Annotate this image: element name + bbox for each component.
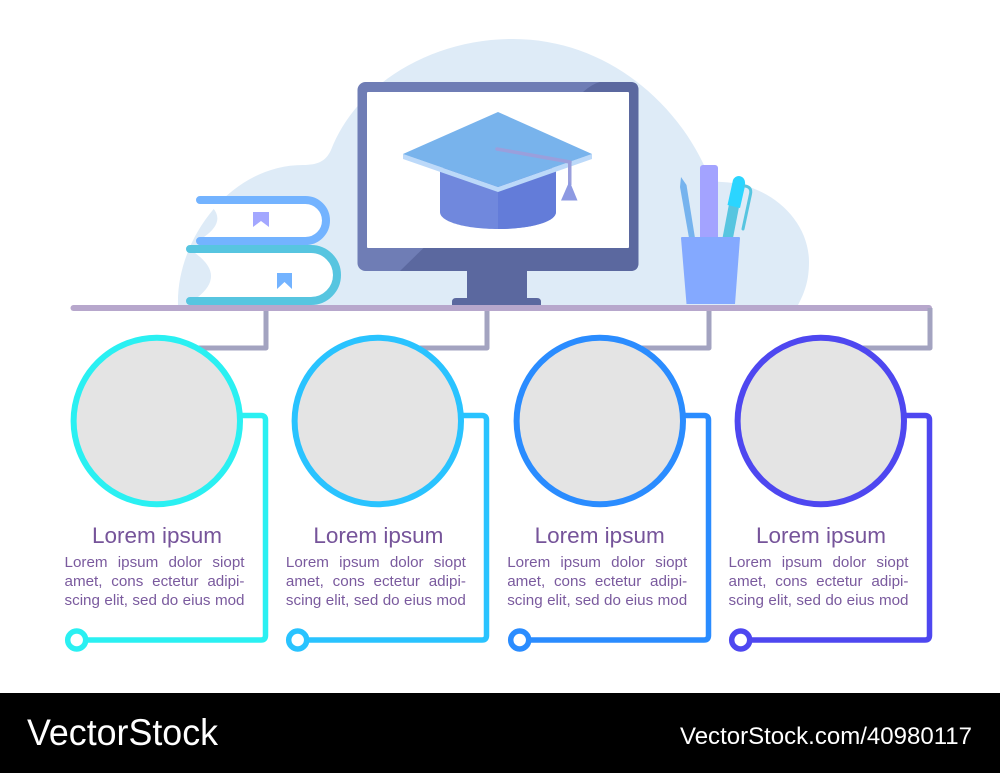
ring marker (510, 631, 528, 649)
coloured frame line (527, 416, 708, 640)
grey connector (858, 308, 930, 348)
body text: Lorem ipsum dolor siopt (64, 554, 244, 571)
background blob (178, 39, 809, 305)
body text: Lorem ipsum dolor siopt (286, 554, 466, 571)
coloured frame line (84, 416, 266, 640)
image circle (516, 338, 683, 504)
grey connector (194, 311, 266, 348)
body text: Lorem ipsum dolor siopt (507, 554, 687, 571)
body text (507, 554, 688, 609)
body text: scing elit, sed do eius mod (64, 592, 244, 609)
image circle (738, 338, 904, 504)
body text: scing elit, sed do eius mod (507, 592, 687, 609)
heading: Lorem ipsum (756, 523, 886, 548)
body text (286, 554, 466, 609)
panel: step 2 (286, 311, 490, 652)
grey connector (637, 311, 709, 348)
grey connector (415, 311, 487, 348)
icon: computer monitor (358, 82, 638, 305)
shelf line (74, 305, 929, 311)
body text: amet, cons ectetur adipi- (507, 573, 687, 590)
image circle (295, 338, 461, 504)
body text (64, 554, 244, 609)
body text: amet, cons ectetur adipi- (286, 573, 466, 590)
body text (728, 554, 908, 609)
heading: Lorem ipsum (535, 523, 665, 548)
body text: scing elit, sed do eius mod (728, 592, 908, 609)
ring marker (68, 631, 86, 649)
body text: amet, cons ectetur adipi- (64, 573, 244, 590)
icon: pen holder (680, 165, 751, 304)
panel: step 4 (728, 308, 932, 652)
icon: graduation cap (403, 112, 592, 229)
coloured frame line (748, 416, 930, 640)
coloured frame line (305, 416, 487, 640)
body text: scing elit, sed do eius mod (286, 592, 466, 609)
body text: Lorem ipsum dolor siopt (728, 554, 908, 571)
panel: step 3 (507, 311, 712, 652)
icon: stacked books (190, 200, 337, 301)
illustration: desk scene (70, 39, 932, 311)
footer image id: VectorStock.com/40980117 (680, 723, 972, 750)
image circle (74, 338, 240, 504)
heading: Lorem ipsum (92, 523, 222, 548)
heading: Lorem ipsum (313, 523, 443, 548)
panel: step 1 (64, 311, 268, 652)
footer band (0, 693, 1000, 773)
ring marker (289, 631, 307, 649)
body text: amet, cons ectetur adipi- (728, 573, 908, 590)
footer logo text: VectorStock (27, 712, 218, 753)
ring marker (732, 631, 750, 649)
